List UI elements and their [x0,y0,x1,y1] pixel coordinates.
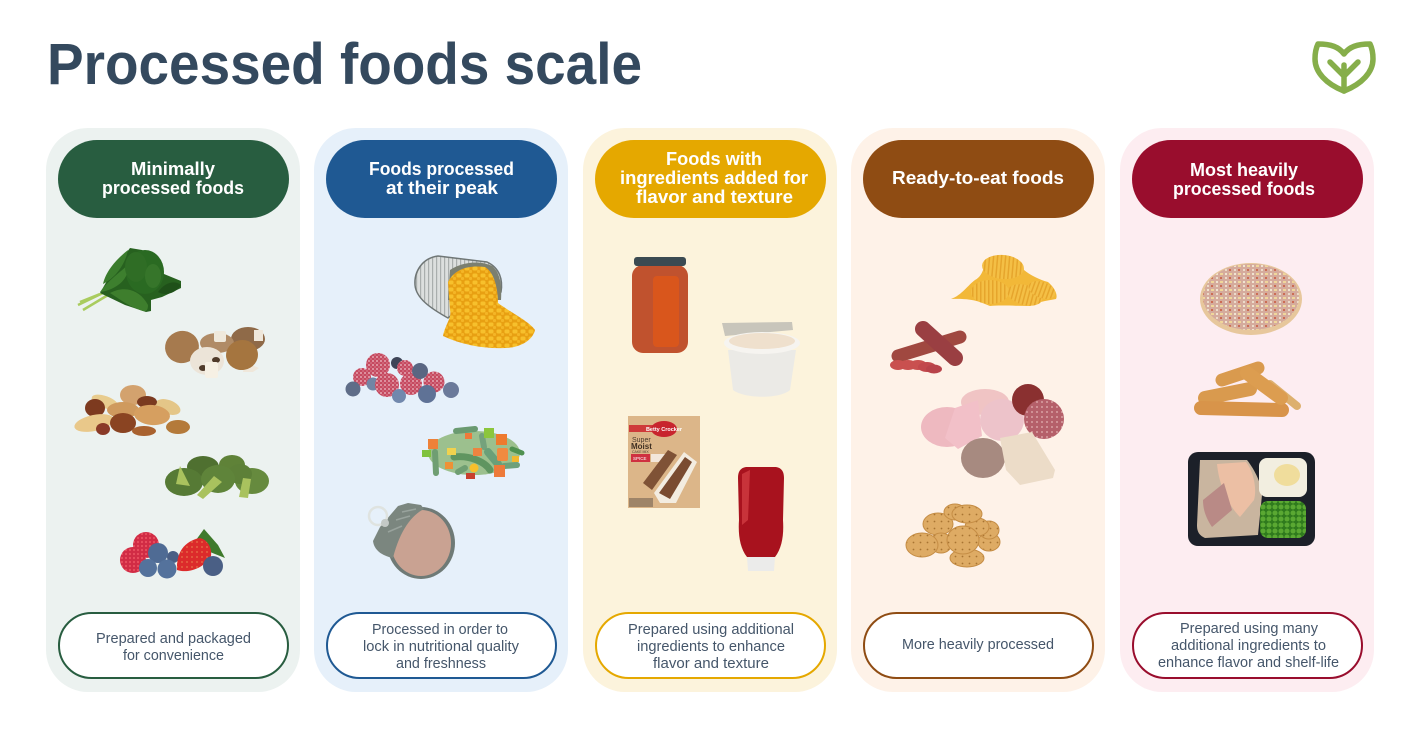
text: prepared using many: Prepared using many [1180,621,1319,637]
icon: tv dinner tray [1188,452,1315,546]
title: Processed foods scale [47,32,642,97]
icon: cake mix box: Moist [631,442,652,451]
icon: spinach [78,248,181,312]
heading: foods with ingredients added: ingredients added for [620,168,808,188]
text: more heavily processed: More heavily processed [902,637,1054,653]
heading: most heavily processed foods: processed foods [1173,179,1315,199]
icon: deli meats [921,384,1064,485]
heading: foods with ingredients added: Foods with [666,149,762,169]
text: prepared using additional: flavor and texture [653,656,769,672]
text: prepared and packaged: Prepared and packaged [96,631,251,647]
icon: nuts [73,385,190,436]
icon: leaf heart logo [1315,44,1373,91]
heading: minimally processed foods: Minimally [131,159,215,179]
icon: canned tuna [369,503,455,579]
text: prepared using additional: ingredients to enhance [637,639,785,655]
text: prepared using additional: Prepared using additional [628,622,794,638]
text: prepared using many [1133,613,1362,678]
icon: yogurt cup [722,322,800,397]
icon: frozen pizza [1200,263,1302,335]
heading: foods processed at their peak [326,140,557,218]
text: processed in order to lock in: Processed in order to [372,622,508,638]
heading: most heavily processed foods [1132,140,1363,218]
icon: frozen mixed vegetables [422,428,522,479]
text: prepared using many: additional ingredients to [1171,638,1326,654]
icon: breaded chicken fingers [1201,368,1297,410]
text: prepared using additional [596,613,825,678]
heading: foods with ingredients added [595,140,826,218]
panel: foods processed at their peak [314,128,568,692]
icon: frozen berries [346,353,459,403]
heading: ready-to-eat foods [863,140,1094,218]
heading: foods with ingredients added: flavor and texture [636,187,793,207]
icon: cake mix box: Super [632,437,651,444]
icon: crackers [906,504,1000,567]
panel: foods with ingredients added [583,128,837,692]
text: processed in order to lock in: and freshness [396,656,486,672]
text: processed in order to lock in: lock in nutritional quality [363,639,520,655]
icon: canned corn [415,256,535,348]
icon: cake mix box: SPICE [633,456,647,461]
icon: cake mix box: Betty Crocker [646,427,683,433]
icon: potato chips [951,253,1058,309]
icon: berries [120,529,225,578]
text: processed in order to lock in [327,613,556,678]
panel: minimally processed foods [46,128,300,692]
heading: minimally processed foods: processed foods [102,178,244,198]
text: prepared and packaged: for convenience [123,648,224,664]
heading: ready-to-eat foods: Ready-to-eat foods [892,168,1064,188]
heading: most heavily processed foods: Most heavily [1190,160,1298,180]
heading: foods processed at their peak: Foods processed [369,159,514,179]
panel: ready-to-eat foods [851,128,1105,692]
panel: most heavily processed foods [1120,128,1374,692]
text: prepared and packaged [59,613,288,678]
heading: minimally processed foods [58,140,289,218]
icon: cake mix box [628,416,700,508]
icon: broccoli [165,455,269,499]
icon: sauce jar [632,257,688,353]
heading: foods processed at their peak: at their peak [386,178,499,198]
icon: mushrooms [161,327,265,378]
icon: cake mix box: CAKE MIX [632,450,649,454]
text: more heavily processed [864,613,1093,678]
text: prepared using many: enhance flavor and shelf-life [1158,655,1339,671]
icon: salami [890,329,960,374]
icon: ketchup bottle [738,467,784,571]
